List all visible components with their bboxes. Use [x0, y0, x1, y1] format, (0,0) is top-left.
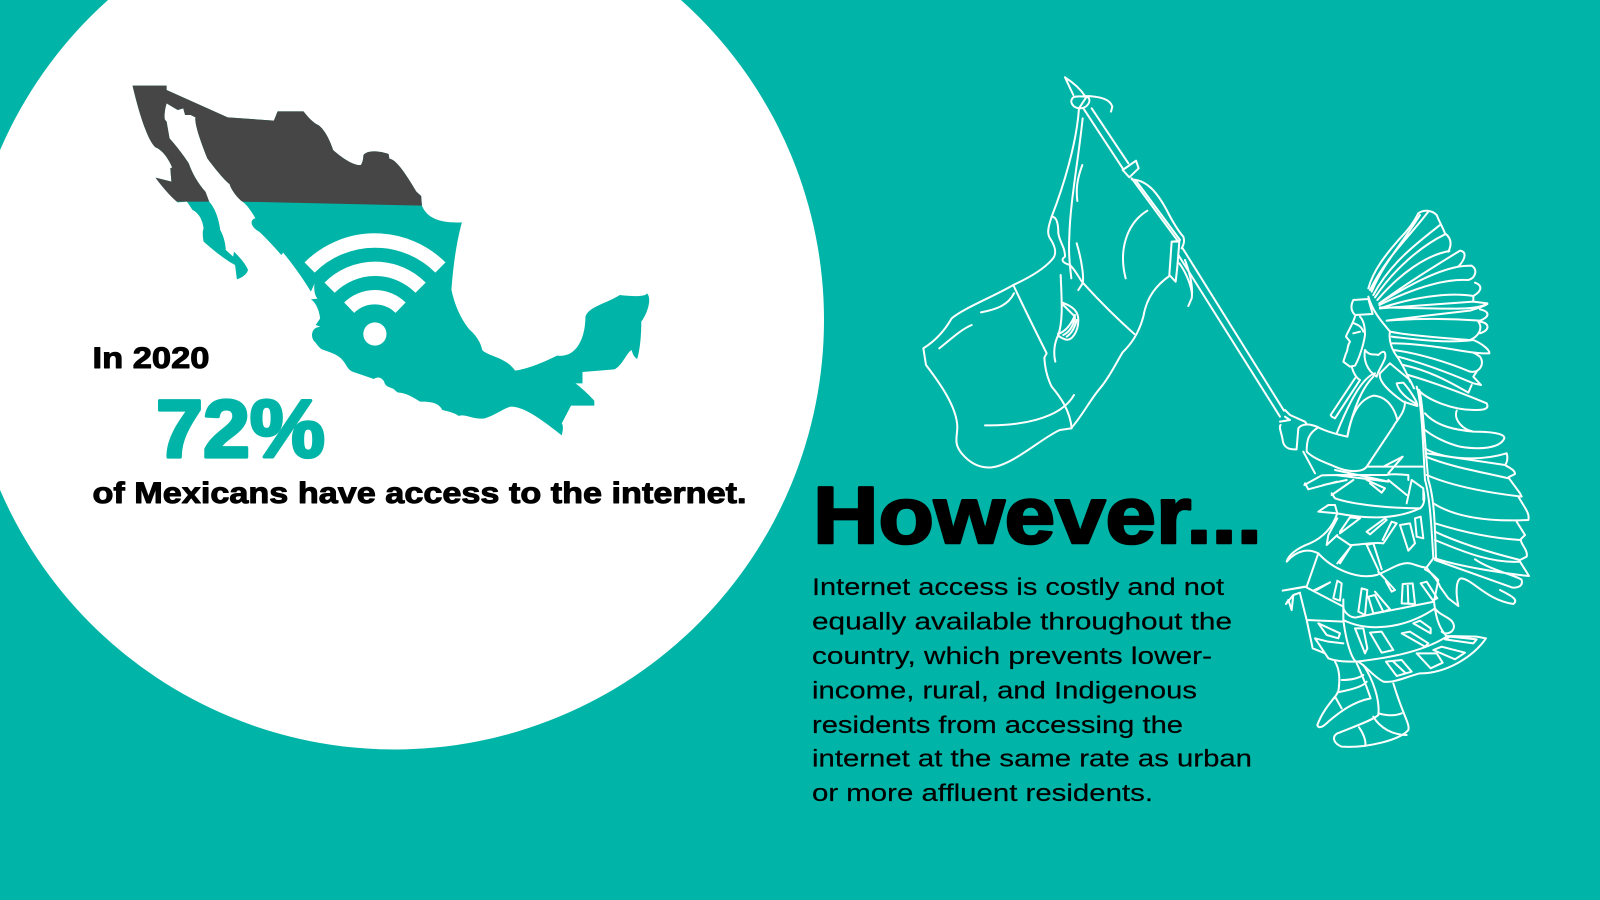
map: teal connected share: [133, 86, 649, 435]
text: In 2020: In 2020: [92, 342, 210, 375]
body paragraph: country, which prevents lower-: [812, 643, 1212, 670]
white circle panel: [0, 0, 824, 750]
icon: wifi: [310, 240, 440, 346]
body paragraph: residents from accessing the: [812, 712, 1183, 739]
body paragraph: income, rural, and Indigenous: [812, 677, 1197, 704]
dancer: skirt tiers, feathers and legs: [1283, 480, 1529, 747]
stat: 72%: 72%: [156, 384, 325, 475]
heading: However: However...: [813, 471, 1262, 561]
dancer: upper body and headdress: [1280, 211, 1522, 497]
body paragraph: equally available throughout the: [812, 608, 1232, 635]
text: of Mexicans have access: of Mexicans have access to the internet.: [92, 477, 746, 510]
illustration: Mexican flag line art: [923, 77, 1284, 467]
map: dark northern share: [133, 86, 422, 213]
body paragraph: Internet access is costly and not: [812, 574, 1224, 601]
body paragraph: [812, 574, 1252, 807]
body paragraph: or more affluent residents.: [812, 780, 1153, 807]
map of Mexico with wifi icon: [133, 86, 649, 435]
illustration: dancer with feather headdress: [1280, 211, 1529, 747]
body paragraph: internet at the same rate as urban: [812, 746, 1252, 773]
